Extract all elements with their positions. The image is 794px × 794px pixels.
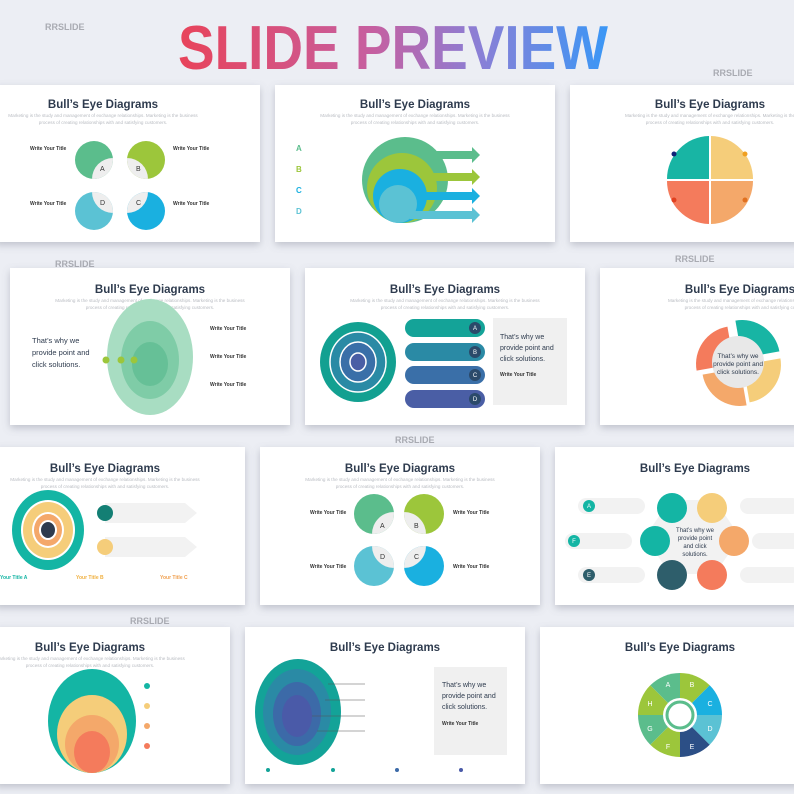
- slide 5: target with pills: [305, 268, 585, 425]
- slide 8: four quarter circles: [260, 447, 540, 605]
- slide 11: blue ellipses with box: provide point and: [442, 693, 496, 700]
- slide 6: arcs around circle: process of creating relationships with and satisfying cu: [685, 305, 794, 310]
- slide 7: target with arrows: Your Title C: [160, 575, 188, 581]
- slide 2: nested circles with arrows: Marketing is the study and management of exchange relationships. Marketing is the business: [320, 113, 510, 118]
- slide 4: green concentric rings: That’s why we: [32, 336, 79, 345]
- slide 8: four quarter circles: C: [414, 554, 419, 561]
- slide 12: octagon wheel: E: [690, 744, 695, 751]
- slide 8: four quarter circles: Write Your Title: [310, 510, 347, 516]
- slide 12: octagon wheel: C: [707, 701, 713, 708]
- slide 5: target with pills: B: [473, 350, 477, 356]
- slide 11: blue ellipses with box: [245, 627, 525, 784]
- slide 4: green concentric rings: provide point and: [32, 348, 90, 357]
- watermarks: RRSLIDE: [130, 616, 170, 626]
- slide 5: target with pills: provide point and: [500, 345, 554, 352]
- slide 8: four quarter circles: Marketing is the study and management of exchange relationships. Marketing is the business: [305, 477, 495, 482]
- slide 10: stacked ellipses: [0, 627, 230, 784]
- watermarks: RRSLIDE: [45, 22, 85, 32]
- slide 4: green concentric rings: Write Your Title: [210, 326, 247, 332]
- slide 1: four quarter circles: D: [100, 200, 105, 207]
- slide 8: four quarter circles: A: [380, 523, 385, 530]
- slide 4: green concentric rings: Write Your Title: [210, 354, 247, 360]
- slide 6: arcs around circle: click solutions.: [717, 369, 759, 376]
- slide 8: four quarter circles: Write Your Title: [310, 564, 347, 570]
- watermarks: RRSLIDE: [713, 68, 753, 78]
- slide 2: nested circles with arrows: C: [296, 186, 302, 195]
- slide 5: target with pills: Write Your Title: [500, 372, 537, 378]
- slide 12: octagon wheel: G: [647, 726, 653, 733]
- slide 10: stacked ellipses: Bull’s Eye Diagrams: [35, 642, 145, 654]
- slide 8: four quarter circles: process of creating relationships with and satisfying customers.: [336, 484, 464, 489]
- watermarks: RRSLIDE: [675, 254, 715, 264]
- slide 6: arcs around circle: That’s why we: [717, 353, 759, 360]
- slide 6: arcs around circle: Bull’s Eye Diagrams: [685, 284, 794, 296]
- slide 7: target with arrows: process of creating relationships with and satisfying customers.: [41, 484, 169, 489]
- slide 2: nested circles with arrows: [275, 85, 555, 242]
- slide 8: four quarter circles: Bull’s Eye Diagrams: [345, 463, 455, 475]
- slide 12: octagon wheel: [540, 627, 794, 784]
- slide 11: blue ellipses with box: That’s why we: [442, 682, 486, 689]
- slide 7: target with arrows: Marketing is the study and management of exchange relationships. Marketing is the business: [10, 477, 200, 482]
- slide 3: quadrant circle: process of creating relationships with and satisfying customers.: [646, 120, 774, 125]
- slide 7: target with arrows: Your Title B: [76, 575, 104, 581]
- slide 4: green concentric rings: Bull’s Eye Diagrams: [95, 284, 205, 296]
- slide 4: green concentric rings: click solutions.: [32, 360, 80, 369]
- slide 8: four quarter circles: B: [414, 523, 419, 530]
- slide 1: four quarter circles: Marketing is the study and management of exchange relationships. Marketing is the business: [8, 113, 198, 118]
- watermarks: RRSLIDE: [395, 435, 435, 445]
- slide 9: hexagon of circles: Bull’s Eye Diagrams: [640, 463, 750, 475]
- slide 4: green concentric rings: process of creating relationships with and satisfying customers.: [86, 305, 214, 310]
- slide 1: four quarter circles: Bull’s Eye Diagrams: [48, 99, 158, 111]
- slide 2: nested circles with arrows: D: [296, 207, 302, 216]
- slide 3: quadrant circle: Marketing is the study and management of exchange relationships. Marketing is the: [625, 113, 794, 118]
- slide 12: octagon wheel: H: [647, 701, 653, 708]
- slide 8: four quarter circles: D: [380, 554, 385, 561]
- slide 12: octagon wheel: A: [666, 682, 671, 689]
- slide 8: four quarter circles: Write Your Title: [453, 510, 490, 516]
- slide 3: quadrant circle: [570, 85, 794, 242]
- slide 1: four quarter circles: C: [136, 200, 141, 207]
- watermarks: RRSLIDE: [55, 259, 95, 269]
- slide 1: four quarter circles: B: [136, 166, 141, 173]
- slide 6: arcs around circle: [600, 268, 794, 425]
- slide 9: hexagon of circles: and click: [683, 544, 708, 550]
- slide 1: four quarter circles: Write Your Title: [173, 201, 210, 207]
- slide 4: green concentric rings: Marketing is the study and management of exchange relationships. Marketing is the business: [55, 298, 245, 303]
- slide 2: nested circles with arrows: Bull’s Eye Diagrams: [360, 99, 470, 111]
- slide 11: blue ellipses with box: Write Your Title: [442, 721, 479, 727]
- slide 1: four quarter circles: [0, 85, 260, 242]
- slide 1: four quarter circles: process of creating relationships with and satisfying customers.: [39, 120, 167, 125]
- slide 2: nested circles with arrows: A: [296, 144, 302, 153]
- slide 1: four quarter circles: Write Your Title: [30, 201, 67, 207]
- slide 9: hexagon of circles: [555, 447, 794, 605]
- slide 7: target with arrows: Bull’s Eye Diagrams: [50, 463, 160, 475]
- slide 2: nested circles with arrows: B: [296, 165, 302, 174]
- slide 8: four quarter circles: Write Your Title: [453, 564, 490, 570]
- slide 12: octagon wheel: B: [690, 682, 695, 689]
- slide 6: arcs around circle: provide point and: [713, 361, 763, 368]
- slide 5: target with pills: That’s why we: [500, 334, 544, 341]
- slide 1: four quarter circles: A: [100, 166, 105, 173]
- slide 9: hexagon of circles: provide point: [678, 536, 713, 542]
- watermarks: [45, 22, 753, 626]
- slide 12: octagon wheel: Bull’s Eye Diagrams: [625, 642, 735, 654]
- slide 9: hexagon of circles: F: [572, 539, 576, 545]
- slide 11: blue ellipses with box: Bull’s Eye Diagrams: [330, 642, 440, 654]
- slide 4: green concentric rings: [10, 268, 290, 425]
- slide 9: hexagon of circles: That’s why we: [676, 528, 715, 534]
- slide 2: nested circles with arrows: process of creating relationships with and satisfying customers.: [351, 120, 479, 125]
- slide 12: octagon wheel: D: [707, 726, 713, 733]
- slide 4: green concentric rings: Write Your Title: [210, 382, 247, 388]
- slide 9: hexagon of circles: solutions.: [682, 552, 708, 558]
- slide 1: four quarter circles: Write Your Title: [30, 146, 67, 152]
- slide 7: target with arrows: [0, 447, 245, 605]
- slide 5: target with pills: A: [473, 326, 477, 332]
- slide 5: target with pills: click solutions.: [500, 356, 545, 363]
- slide 1: four quarter circles: Write Your Title: [173, 146, 210, 152]
- slide 12: octagon wheel: F: [666, 744, 670, 751]
- slide 3: quadrant circle: Bull’s Eye Diagrams: [655, 99, 765, 111]
- slide 7: target with arrows: Your Title A: [0, 575, 28, 581]
- slide 10: stacked ellipses: Marketing is the study and management of exchange relationships. Marketing is the business: [0, 656, 185, 661]
- slide 5: target with pills: D: [473, 397, 478, 403]
- title: SLIDE PREVIEW: [178, 14, 608, 83]
- slide 9: hexagon of circles: A: [587, 504, 591, 510]
- slide 11: blue ellipses with box: click solutions.: [442, 704, 487, 711]
- slide 5: target with pills: C: [473, 373, 478, 379]
- slide 10: stacked ellipses: process of creating relationships with and satisfying customers.: [26, 663, 154, 668]
- slide 5: target with pills: Bull’s Eye Diagrams: [390, 284, 500, 296]
- slide 5: target with pills: process of creating relationships with and satisfying customers.: [381, 305, 509, 310]
- slide 9: hexagon of circles: E: [587, 573, 591, 579]
- slide 5: target with pills: Marketing is the study and management of exchange relationships. Marketing is the business: [350, 298, 540, 303]
